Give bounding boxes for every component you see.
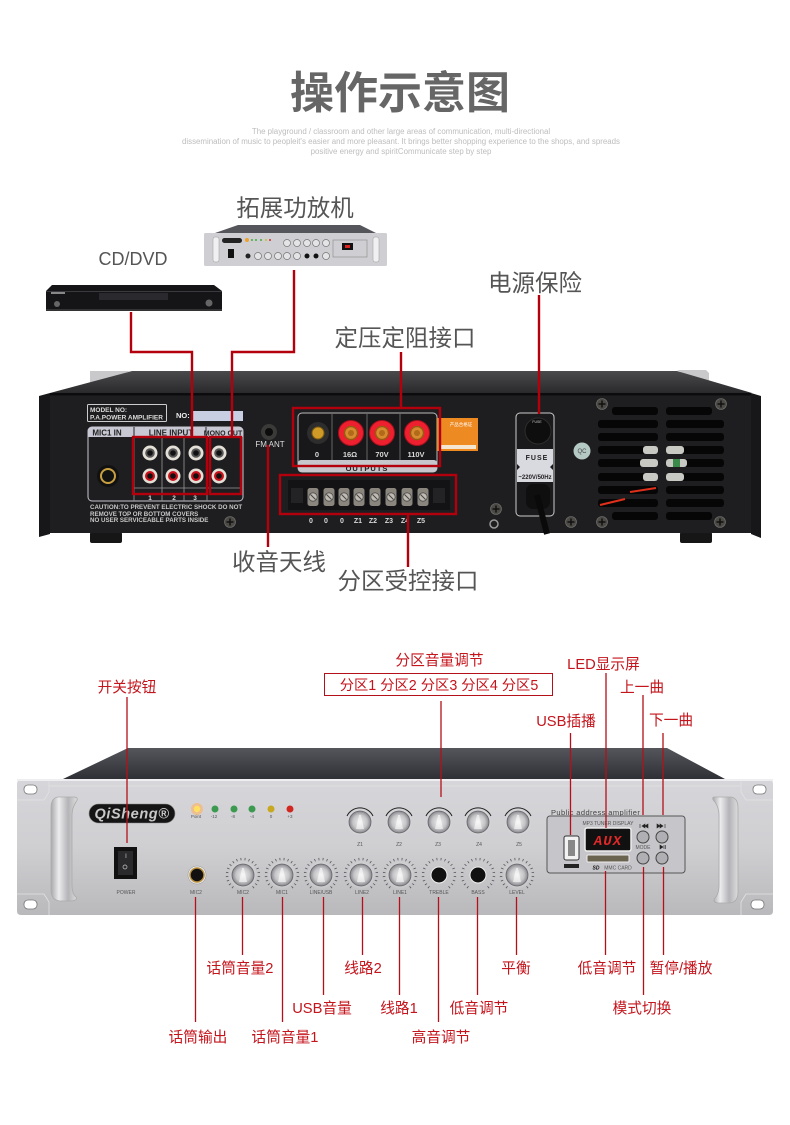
label: power switch: 开关按钮 [98,679,157,696]
level LEDs [191,803,294,819]
subtitle paragraph: positive energy and spiritCommunicate step by step [311,147,492,156]
callout lines: front panel top [127,673,663,843]
volume and tone knobs [227,859,533,896]
outputs panel [298,413,437,473]
left handle [51,797,77,901]
MP3 module: MODE [636,845,651,851]
terminal strip: Z3 [385,518,393,525]
label: pause/play: 暂停/播放 [650,960,713,977]
label: USB playback: USB插播 [536,713,596,730]
zone knobs: Z5 [516,842,522,848]
model plate: NO: [176,411,190,420]
volume and tone knobs: LINE1 [393,890,407,896]
zone knobs: Z1 [357,842,363,848]
level LEDs: -12 [211,814,218,819]
heading: zone volume adjust: 分区音量调节 [395,652,484,669]
zone knobs: Z4 [476,842,482,848]
icon: extension amplifier [204,225,387,266]
MP3 module: AUX [593,834,623,850]
volume and tone knobs: LINE/USB [310,890,333,896]
orange product sticker: 产品合格证 [450,421,473,428]
label: CD/DVD: CD/DVD [98,249,168,269]
level LEDs: -8 [231,814,235,819]
connector line: FM antenna [267,445,269,547]
connector line: terminal strip [407,514,409,567]
level LEDs: +3 [287,814,293,819]
MP3 module: MMC CARD [604,866,632,872]
caution text [90,504,242,524]
label: mode switch: 模式切换 [613,1000,672,1017]
label: next track: 下一曲 [649,712,693,729]
input panel: 3 [193,495,197,502]
subtitle paragraph: dissemination of music to peopleit's easier and more pleasant. It brings better shopping experience to the shops, and spreads [182,137,620,146]
caution text: CAUTION:TO PREVENT ELECTRIC SHOCK DO NOT [90,504,242,511]
MIC2 jack: MIC2 [190,890,202,896]
zone knobs: Z3 [435,842,441,848]
label: power fuse: 电源保险 [488,270,582,296]
rear top cover [50,371,752,393]
subtitle paragraph: The playground / classroom and other large areas of communication, multi-directional [252,127,550,136]
label: USB volume: USB音量 [292,1000,352,1017]
model plate: P.A.POWER AMPLIFIER [90,414,163,422]
QC sticker: QC [578,449,587,455]
terminal strip: Z1 [354,518,362,525]
MIC2 jack [188,866,206,896]
terminal strip: Z4 [401,518,409,525]
front top cover [63,748,725,779]
terminal strip: Z2 [369,518,377,525]
icon: CD/DVD player [46,285,222,311]
zone knobs [345,807,533,848]
label: mic volume 2: 话筒音量2 [207,960,273,977]
volume and tone knobs: MIC2 [237,890,249,896]
label: bass adjust: 低音调节 [450,1000,508,1017]
QC sticker [574,442,590,460]
model plate [88,404,243,422]
label: constant voltage and impedance terminals: 定压定阻接口 [334,325,476,351]
MP3 module: Public address amplifier [551,808,640,817]
input panel: MIC1 IN [92,428,122,438]
outputs panel: 110V [407,450,425,459]
MP3 module: SD [593,866,600,872]
outputs panel: OUTPUTS [346,464,388,473]
brand logo: QiSheng® [94,806,170,822]
model plate: MODEL NO: [90,407,127,414]
input panel: LINE INPUT [149,428,193,438]
terminal strip: Z5 [417,518,425,525]
ventilation grille with fan [598,407,724,520]
label: line 1: 线路1 [380,1000,418,1017]
label: extension amplifier: 拓展功放机 [236,195,354,221]
caution text: REMOVE TOP OR BOTTOM COVERS [90,511,198,518]
callout lines: front panel bottom [196,867,664,1022]
level LEDs: 0 [270,814,273,819]
outputs panel: 16Ω [343,450,357,459]
terminal strip: 0 [340,518,344,525]
highlight box: line input [133,437,207,494]
fuse panel: FUSE [532,420,542,424]
label: previous track: 上一曲 [620,679,664,696]
label: balance: 平衡 [501,960,531,977]
outputs panel: 70V [375,450,389,459]
panel: rear of amplifier [39,370,761,543]
volume and tone knobs: TREBLE [429,890,449,896]
terminal strip: 0 [324,518,328,525]
highlight box: outputs [293,408,440,466]
caution text: NO USER SERVICEABLE PARTS INSIDE [90,517,208,524]
connector line: extension amplifier to mono out [232,270,294,437]
MP3 module: MP3 TUNER DISPLAY [583,821,634,827]
power switch: I [125,854,127,860]
label: FM antenna: 收音天线 [232,549,326,575]
zone knobs: Z2 [396,842,402,848]
FM antenna connector: FM ANT [255,440,285,449]
power switch: POWER [117,890,136,896]
right handle [713,797,738,903]
volume and tone knobs: MIC1 [276,890,288,896]
highlight box: mono out [210,437,241,494]
terminal strip: 0 [309,518,313,525]
terminal strip [288,480,450,525]
volume and tone knobs: LEVEL [509,890,525,896]
label: bass adjust (module): 低音调节 [578,960,636,977]
label: treble adjust: 高音调节 [412,1029,470,1046]
FM antenna connector [255,424,285,449]
label: LED display: LED显示屏 [567,657,640,673]
volume and tone knobs: BASS [471,890,485,896]
title: 操作示意图 [290,69,510,118]
label: mic output: 话筒输出 [169,1029,227,1046]
level LEDs: -4 [250,814,254,819]
label: line 2: 线路2 [344,960,382,977]
fuse panel: ~220V/50Hz [518,475,552,481]
zone list box [324,674,552,696]
level LEDs: Point [191,814,202,819]
volume and tone knobs: LINE2 [355,890,369,896]
input panel [88,427,243,502]
power switch [114,847,137,896]
connector line: fuse [538,295,540,414]
mounting holes [24,785,766,909]
input panel: 1 [148,495,152,502]
label: mic volume 1: 话筒音量1 [252,1029,318,1046]
MP3 module [547,808,685,873]
connector line: CD/DVD to line input [131,312,192,437]
subtitle paragraph [182,127,620,156]
fuse panel [516,413,554,534]
label: zone control terminals: 分区受控接口 [338,568,478,594]
front face [17,780,773,915]
panel: front of amplifier [17,748,773,915]
orange product sticker [437,418,478,451]
input panel: MONO OUT [204,430,243,438]
outputs panel: 0 [315,450,319,459]
zone list box: 分区1 分区2 分区3 分区4 分区5 [340,677,538,694]
panel screws [490,398,726,528]
fuse panel: FUSE [526,455,548,462]
input panel: 2 [172,495,176,502]
highlight box: terminal strip [280,475,456,514]
connector line: outputs [400,352,402,408]
rear brackets [90,370,709,385]
